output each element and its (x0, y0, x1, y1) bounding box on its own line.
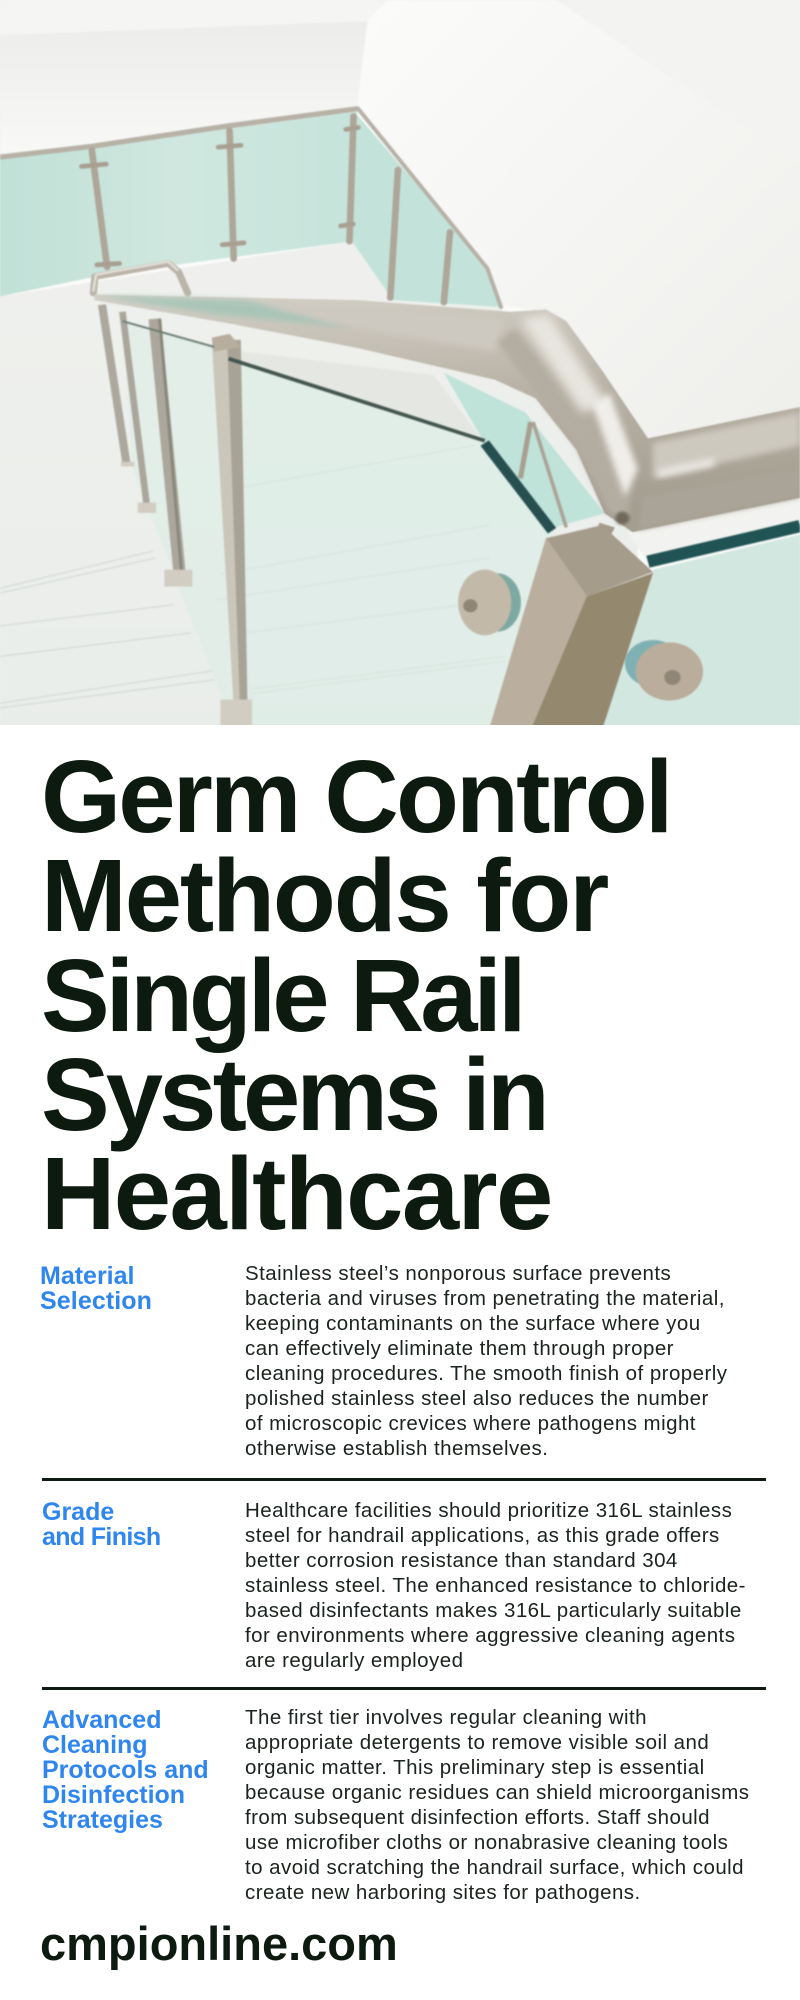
wall and ceiling background (0, 0, 800, 730)
back glass panels (0, 112, 501, 307)
title: Single Rail (41, 938, 522, 1053)
dark glass edges (122, 321, 552, 531)
section heading: Grade and Finish: and Finish (42, 1523, 161, 1551)
photo: glass staircase with stainless steel handrail (0, 0, 800, 725)
title (41, 739, 671, 1251)
section heading: Grade and Finish (42, 1498, 161, 1551)
glass standoff left (458, 570, 521, 635)
section text: Grade and Finish: for environments where aggressive cleaning agents (245, 1624, 735, 1647)
front glass pane (122, 324, 605, 730)
dark glass edge right (648, 526, 800, 562)
section heading: Grade and Finish: Grade (42, 1498, 114, 1526)
section text: Grade and Finish: steel for handrail applications, as this grade offers (245, 1524, 720, 1547)
back handrail (0, 109, 501, 307)
main handrail (94, 294, 800, 532)
section heading: Advanced Cleaning Protocols and Disinfection Strategies: Protocols and (42, 1756, 209, 1784)
section text: Advanced Cleaning Protocols: to avoid scratching the handrail surface, which could (245, 1856, 744, 1879)
glass standoff right (625, 640, 703, 700)
section text: Advanced Cleaning Protocols: appropriate detergents to remove visible soil and (245, 1731, 709, 1754)
section text: Material Selection (245, 1262, 728, 1460)
section text: Grade and Finish: stainless steel. The enhanced resistance to chloride- (245, 1574, 746, 1597)
section heading: Advanced Cleaning Protocols and Disinfection Strategies: Cleaning (42, 1731, 148, 1759)
section text: Material Selection: keeping contaminants on the surface where you (245, 1312, 701, 1335)
section text: Material Selection: cleaning procedures. The smooth finish of properly (245, 1362, 728, 1385)
section text: Material Selection: polished stainless steel also reduces the number (245, 1387, 709, 1410)
section text: Material Selection: otherwise establish themselves. (245, 1437, 548, 1460)
section text: Grade and Finish: better corrosion resistance than standard 304 (245, 1549, 678, 1572)
small return rail (93, 262, 188, 293)
section text: Grade and Finish: based disinfectants makes 316L particularly suitable (245, 1599, 742, 1622)
main post with top collar (489, 523, 653, 730)
section heading: Advanced Cleaning Protocols and Disinfection Strategies: Strategies (42, 1806, 163, 1834)
section heading: Material Selection (40, 1262, 152, 1315)
section heading: Advanced Cleaning Protocols and Disinfection Strategies: Disinfection (42, 1781, 185, 1809)
section text: Advanced Cleaning Protocols: The first tier involves regular cleaning with (245, 1706, 647, 1729)
section text: Advanced Cleaning Protocols: from subsequent disinfection efforts. Staff should (245, 1806, 710, 1829)
section text: Advanced Cleaning Protocols: organic matter. This preliminary step is essential (245, 1756, 705, 1779)
section text: Grade and Finish: Healthcare facilities should prioritize 316L stainless (245, 1499, 732, 1522)
section text: Grade and Finish: are regularly employed (245, 1649, 463, 1672)
section text: Material Selection: can effectively eliminate them through proper (245, 1337, 674, 1360)
section text: Advanced Cleaning Protocols (245, 1706, 750, 1904)
section text: Material Selection: Stainless steel’s nonporous surface prevents (245, 1262, 671, 1285)
footer website: cmpionline.com (40, 1917, 398, 1970)
title: Healthcare (41, 1136, 552, 1251)
section text: Advanced Cleaning Protocols: because organic residues can shield microorganisms (245, 1781, 750, 1804)
title: Methods for (41, 838, 607, 953)
section text: Grade and Finish (245, 1499, 746, 1672)
marble floor and stairs (0, 241, 638, 730)
section text: Material Selection: bacteria and viruses from penetrating the material, (245, 1287, 725, 1310)
section heading: Material Selection: Material (40, 1262, 134, 1290)
front posts (102, 305, 566, 729)
section heading: Advanced Cleaning Protocols and Disinfection Strategies: Advanced (42, 1706, 161, 1734)
title: Germ Control (41, 739, 671, 854)
section text: Advanced Cleaning Protocols: use microfiber cloths or nonabrasive cleaning tools (245, 1831, 728, 1854)
right lower glass (599, 534, 800, 730)
section heading: Advanced Cleaning Protocols and Disinfection Strategies (42, 1706, 209, 1834)
white band under right arm (628, 492, 800, 563)
section text: Material Selection: of microscopic crevices where pathogens might (245, 1412, 696, 1435)
title: Systems in (41, 1037, 546, 1152)
section text: Advanced Cleaning Protocols: create new harboring sites for pathogens. (245, 1881, 641, 1904)
section heading: Material Selection: Selection (40, 1287, 152, 1315)
